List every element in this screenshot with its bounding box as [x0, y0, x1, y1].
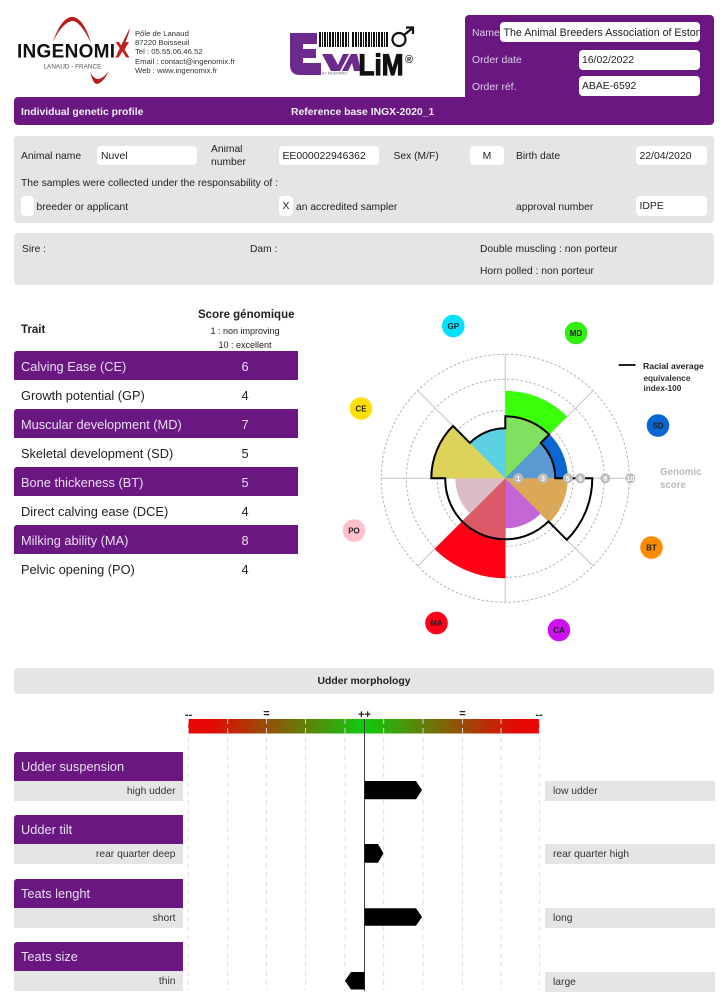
trait marker: PO: [343, 519, 365, 542]
row: growth potential: 4: [241, 388, 249, 403]
row: milking ability: [14, 525, 298, 554]
row: skeletal development: [21, 446, 249, 461]
scale labels: =: [459, 708, 466, 720]
low end label: [14, 908, 183, 928]
sector: bone thickeness: [505, 478, 568, 522]
right label: large: large: [553, 976, 576, 988]
row: pelvic opening: Pelvic opening (PO): [21, 562, 135, 577]
label: animal number: [211, 145, 246, 168]
scale labels: [185, 708, 543, 721]
bar: teats size: [345, 972, 364, 990]
score legend: 10 : excellent: [218, 340, 272, 350]
label: order date: Order date: [472, 55, 522, 66]
label: approval number: approval number: [516, 202, 593, 212]
contact details: Web : www.ingenomix.fr: [135, 66, 217, 75]
trait marker: SD: [647, 414, 669, 437]
row label: teats size: [14, 942, 183, 991]
right label: large: [545, 972, 715, 992]
legend: racial average: equivalence: [644, 374, 691, 383]
sector: growth potential: [470, 428, 505, 478]
bar: udder tilt: [364, 844, 384, 863]
contact details: Email : contact@ingenomix.fr: [135, 57, 235, 66]
scale labels: --: [185, 709, 192, 721]
low end label: thin: [159, 976, 176, 987]
contact details: 87220 Boisseuil: [135, 38, 189, 47]
label: genomic score axis: [660, 467, 702, 491]
right label: rear quarter high: [545, 844, 715, 864]
trait marker: MD: [565, 322, 587, 344]
scale labels: =: [263, 708, 270, 720]
score axis labels: 6: [578, 474, 582, 483]
scale labels: ++: [358, 709, 371, 721]
right label: low udder: [545, 781, 715, 801]
row: calving ease: 6: [241, 359, 249, 374]
contact details: Tel : 05.55.06.46.52: [135, 47, 203, 56]
checkbox: accredited sampler: [279, 196, 293, 216]
logo wordmark: INGENOMI: [17, 42, 115, 62]
trait marker: MA: [425, 612, 448, 634]
legend: racial average: Racial average: [643, 361, 704, 371]
field: animal number: [279, 146, 379, 165]
registered mark: ®: [405, 54, 413, 66]
logo: Evalim: [290, 26, 414, 78]
logo swoosh: [53, 17, 130, 84]
text: double muscling: Double muscling : non porteur: [480, 244, 617, 254]
sector: milking ability: [435, 478, 505, 578]
low end label: high udder: [127, 786, 176, 797]
trait marker: MA: MA: [430, 619, 443, 628]
scale labels: --: [535, 709, 543, 721]
field: name: [500, 22, 700, 42]
text: sire: Sire :: [22, 244, 46, 254]
panel: order details: [465, 15, 714, 100]
trait marker: SD: SD: [652, 422, 664, 430]
trait marker: BT: [640, 536, 663, 559]
label: sex: Sex (M/F): [394, 150, 439, 162]
low end label: rear quarter deep: [96, 849, 176, 860]
right label: low udder: low udder: [553, 786, 598, 797]
field: approval number: [636, 196, 707, 216]
label: animal number: number: [211, 157, 246, 168]
field: order reference: ABAE-6592: [582, 81, 636, 92]
Evalim E and VA: [290, 33, 361, 75]
title: [14, 752, 183, 781]
score axis labels: 10: [626, 474, 634, 483]
title: [14, 942, 183, 971]
title: Udder suspension: [21, 759, 124, 774]
right label: long: long: [553, 913, 572, 924]
heading: udder morphology: Udder morphology: [318, 676, 410, 687]
score axis labels: 3: [541, 474, 545, 483]
bar: teats lenght: [364, 908, 422, 926]
row: muscular development: 7: [241, 417, 249, 432]
field: approval number: IDPE: [640, 201, 664, 212]
row: bone thickeness: 5: [241, 475, 249, 490]
gradient scale bar: [188, 719, 539, 734]
sector: calving ease direct: [505, 478, 541, 528]
label: birth date: Birth date: [516, 150, 560, 162]
score legend: 1 : non improving: [210, 326, 280, 336]
label: name: Name: [472, 28, 500, 39]
row label: teats lenght: [14, 879, 183, 928]
score legend: [210, 326, 280, 350]
row: milking ability: 8: [241, 533, 249, 548]
field: birth date: [636, 146, 707, 165]
panel: animal identification: [14, 136, 714, 223]
bar: udder suspension: [364, 781, 422, 799]
chart: genomic score radar: [342, 314, 704, 642]
racial average outline: [431, 416, 592, 540]
trait marker: GP: [442, 315, 465, 337]
label: animal name: Animal name: [21, 150, 81, 162]
low end label: [14, 971, 183, 991]
field: sex: [470, 146, 504, 165]
column heading: score: Score génomique: [198, 308, 294, 320]
low end label: [14, 844, 183, 864]
by ingenomix: BY INGENOMIX: [322, 72, 348, 76]
contact details: Pôle de Lanaud: [135, 29, 189, 38]
title: Teats size: [21, 949, 78, 964]
trait marker: CE: [350, 397, 372, 420]
sector: calving ease: [430, 425, 505, 478]
row: skeletal development: 5: [241, 446, 249, 461]
contact details: [135, 29, 235, 75]
row: direct calving ease: 4: [241, 504, 249, 519]
column heading: trait: Trait: [21, 324, 45, 336]
title: Teats lenght: [21, 886, 90, 900]
row: pelvic opening: [21, 562, 249, 577]
score axis labels: 5: [566, 474, 570, 483]
row: skeletal development: Skeletal development (SD): [21, 446, 173, 461]
label: genomic score axis: score: [660, 480, 686, 491]
trait marker: CE: CE: [355, 404, 367, 414]
field: animal name: Nuvel: [101, 151, 128, 162]
title: [14, 815, 183, 844]
row: growth potential: Growth potential (GP): [21, 388, 145, 403]
text: sample responsibility: The samples were collected under the responsability of :: [21, 178, 278, 188]
trait marker: GP: GP: [448, 322, 460, 331]
trait marker: CA: CA: [553, 626, 565, 635]
label: breeder or applicant: breeder or applicant: [36, 202, 128, 212]
low end label: short: [153, 912, 176, 924]
score axis labels: [513, 473, 635, 483]
label: order reference: Order réf.: [472, 82, 516, 92]
title: [14, 878, 183, 908]
row: milking ability: Milking ability (MA): [21, 533, 128, 548]
row: pelvic opening: 4: [241, 562, 249, 577]
row: direct calving ease: Direct calving ease (DCE): [21, 504, 168, 519]
table: genomic scores: [14, 308, 298, 577]
right label: long: [545, 908, 715, 928]
trait marker: PO: PO: [348, 526, 360, 536]
field: order reference: [578, 76, 700, 96]
field: sex: M: [483, 151, 491, 162]
trait marker: BT: BT: [646, 544, 657, 552]
trait marker: CA: [548, 619, 570, 641]
checkbox: accredited sampler: X: [283, 201, 289, 212]
sector: skeletal development: [505, 434, 568, 478]
row: growth potential: [21, 388, 249, 403]
text: dam: Dam :: [250, 244, 277, 254]
title: Udder tilt: [21, 822, 72, 837]
chart: udder morphology scale: [185, 708, 543, 991]
row: bone thickeness: Bone thickeness (BT): [21, 475, 143, 490]
right label: rear quarter high: rear quarter high: [553, 849, 629, 860]
Evalim barcode: [319, 32, 388, 47]
field: order date: [578, 50, 700, 70]
sector: muscular development: [505, 391, 567, 478]
header bar: [14, 97, 714, 125]
field: animal name: [97, 146, 197, 165]
score axis labels: 8: [603, 474, 607, 483]
row: bone thickeness: [14, 467, 298, 496]
row: muscular development: [14, 409, 298, 438]
row: direct calving ease: [21, 504, 249, 519]
score axis labels: 1: [516, 474, 520, 483]
sector: pelvic opening: [455, 478, 505, 514]
field: birth date: 22/04/2020: [640, 151, 692, 162]
field: order date: 16/02/2022: [582, 54, 634, 66]
heading: udder morphology: [14, 668, 714, 694]
trait marker: MD: MD: [570, 329, 582, 338]
logo X: X: [115, 38, 130, 62]
logo subtitle: LANAUD - FRANCE: [44, 64, 101, 70]
checkbox: breeder: [21, 196, 34, 216]
label: accredited sampler: an accredited sampler: [296, 202, 397, 212]
panel: parentage: [14, 233, 714, 285]
centre reference line: [364, 719, 366, 991]
label: genomic score axis: Genomic: [660, 467, 702, 478]
field: animal number: EE000022946362: [282, 151, 366, 162]
male symbol: [392, 28, 413, 46]
heading: individual genetic profile: Individual genetic profile: [21, 106, 143, 118]
logo: Ingenomix: [17, 16, 130, 84]
polar plot: [381, 354, 635, 602]
row: calving ease: Calving Ease (CE): [21, 359, 126, 374]
row label: udder tilt: [14, 815, 183, 864]
row: muscular development: Muscular development (MD): [21, 417, 182, 432]
heading: reference base: Reference base INGX-2020_1: [291, 106, 434, 118]
legend: racial average: [619, 361, 704, 393]
row: calving ease: [14, 351, 298, 380]
legend: racial average: index-100: [644, 384, 682, 393]
low end label: [14, 781, 183, 801]
row label: udder suspension: [14, 752, 183, 801]
text: horn polled: Horn polled : non porteur: [480, 266, 594, 276]
